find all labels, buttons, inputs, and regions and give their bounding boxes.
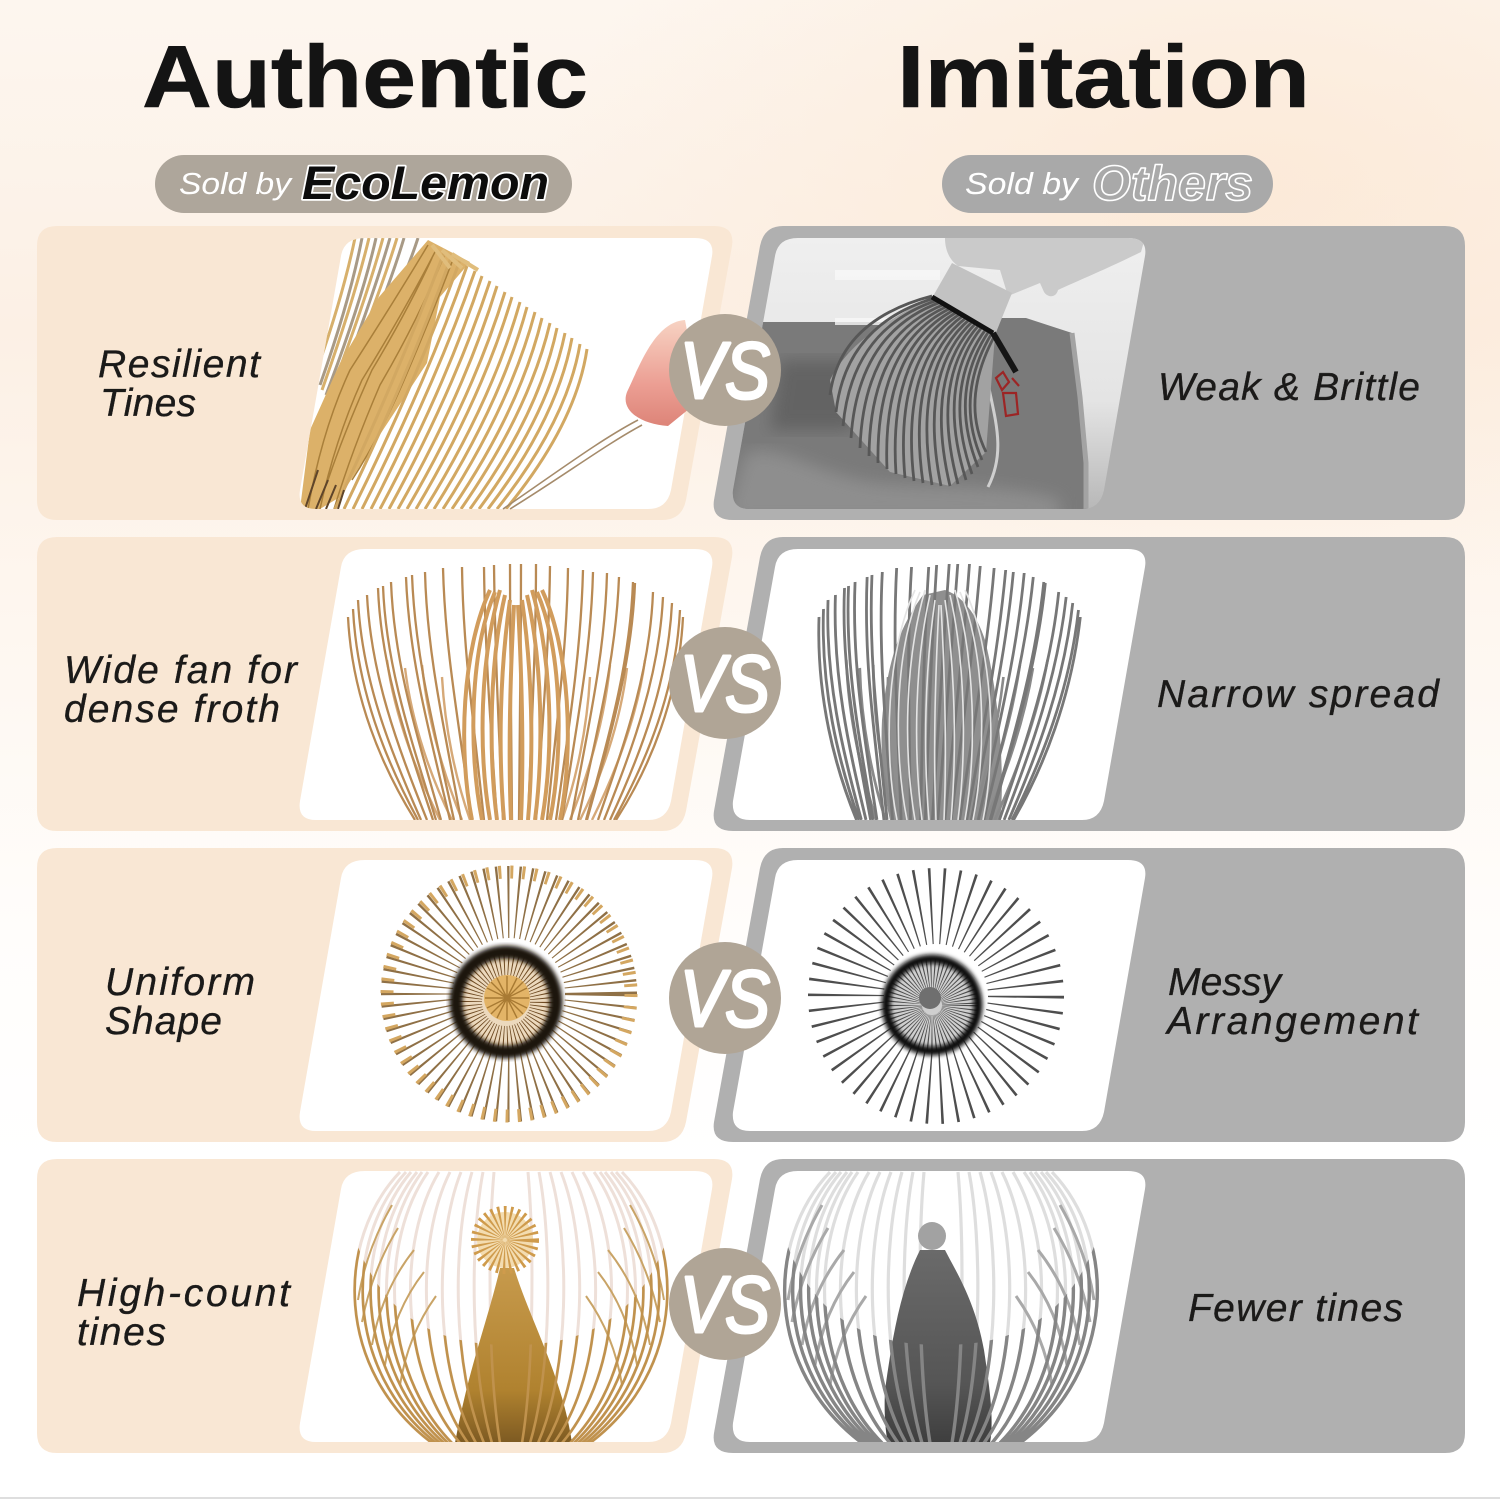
badge: sold by Others: Sold by [965, 166, 1081, 201]
badge: sold by Others [942, 155, 1273, 213]
label: Wide fan for dense froth: Wide fan for [64, 649, 299, 692]
badge: sold by Others: Others [1092, 157, 1253, 211]
badge: VS row 4 [669, 1248, 781, 1360]
icon: fingertip pressing tine [626, 320, 700, 426]
label: Messy Arrangement [1165, 961, 1420, 1043]
label: High-count tines [77, 1272, 292, 1354]
label: High-count tines: High-count [77, 1272, 292, 1315]
badge: VS row 4: VS [680, 1260, 770, 1349]
icon: thin tine to fingertip [503, 420, 642, 509]
label: Uniform Shape: Uniform [105, 961, 255, 1004]
label: Messy Arrangement: Arrangement [1165, 1000, 1420, 1043]
panel: row 3 imitation [714, 848, 1465, 1142]
whisk: fewer tines [785, 1172, 1097, 1443]
whisk: high-count tines [355, 1172, 667, 1443]
title: Authentic: Authentic [142, 27, 588, 126]
whisk: uniform top view [387, 872, 631, 1116]
label: Narrow spread: Narrow spread [1157, 673, 1440, 716]
badge: VS row 3 [669, 942, 781, 1054]
panel: row 1 imitation [714, 226, 1465, 520]
label: Wide fan for dense froth [64, 649, 299, 731]
badge: sold by EcoLemon: EcoLemon [302, 156, 549, 209]
photo: flexing gold tines [300, 238, 587, 509]
title: Imitation: Imitation [897, 27, 1310, 126]
label: Wide fan for dense froth: dense froth [64, 688, 280, 731]
badge: sold by EcoLemon [155, 155, 572, 213]
badge: VS row 1 [669, 314, 781, 426]
label: Resilient Tines: Tines [100, 382, 196, 425]
whisk: wide fan [348, 564, 683, 820]
label: Uniform Shape [105, 961, 255, 1043]
badge: VS row 2: VS [680, 639, 770, 728]
panel: row 4 authentic [37, 1159, 732, 1453]
photo: whisk over stone plate [725, 238, 1145, 520]
whisk: narrow spread [804, 564, 1084, 820]
panel: row 2 authentic [37, 537, 732, 831]
panel: row 4 imitation [714, 1159, 1465, 1453]
label: Messy Arrangement: Messy [1168, 961, 1284, 1004]
badge: sold by EcoLemon: Sold by [179, 166, 294, 201]
label: Fewer tines: Fewer tines [1188, 1287, 1403, 1330]
icon: broken string [986, 389, 1000, 488]
label: High-count tines: tines [77, 1311, 166, 1354]
panel: row 3 authentic [37, 848, 732, 1142]
panel: row 2 imitation [714, 537, 1465, 831]
label: Resilient Tines: Resilient [98, 343, 262, 386]
badge: VS row 3: VS [680, 954, 770, 1043]
whisk: messy top view [846, 906, 1026, 1086]
label: Weak & Brittle: Weak & Brittle [1158, 366, 1420, 409]
badge: VS row 1: VS [680, 326, 770, 415]
label: Uniform Shape: Shape [105, 1000, 222, 1043]
panel: row 1 authentic [37, 226, 732, 520]
badge: VS row 2 [669, 627, 781, 739]
label: Resilient Tines [98, 343, 262, 425]
